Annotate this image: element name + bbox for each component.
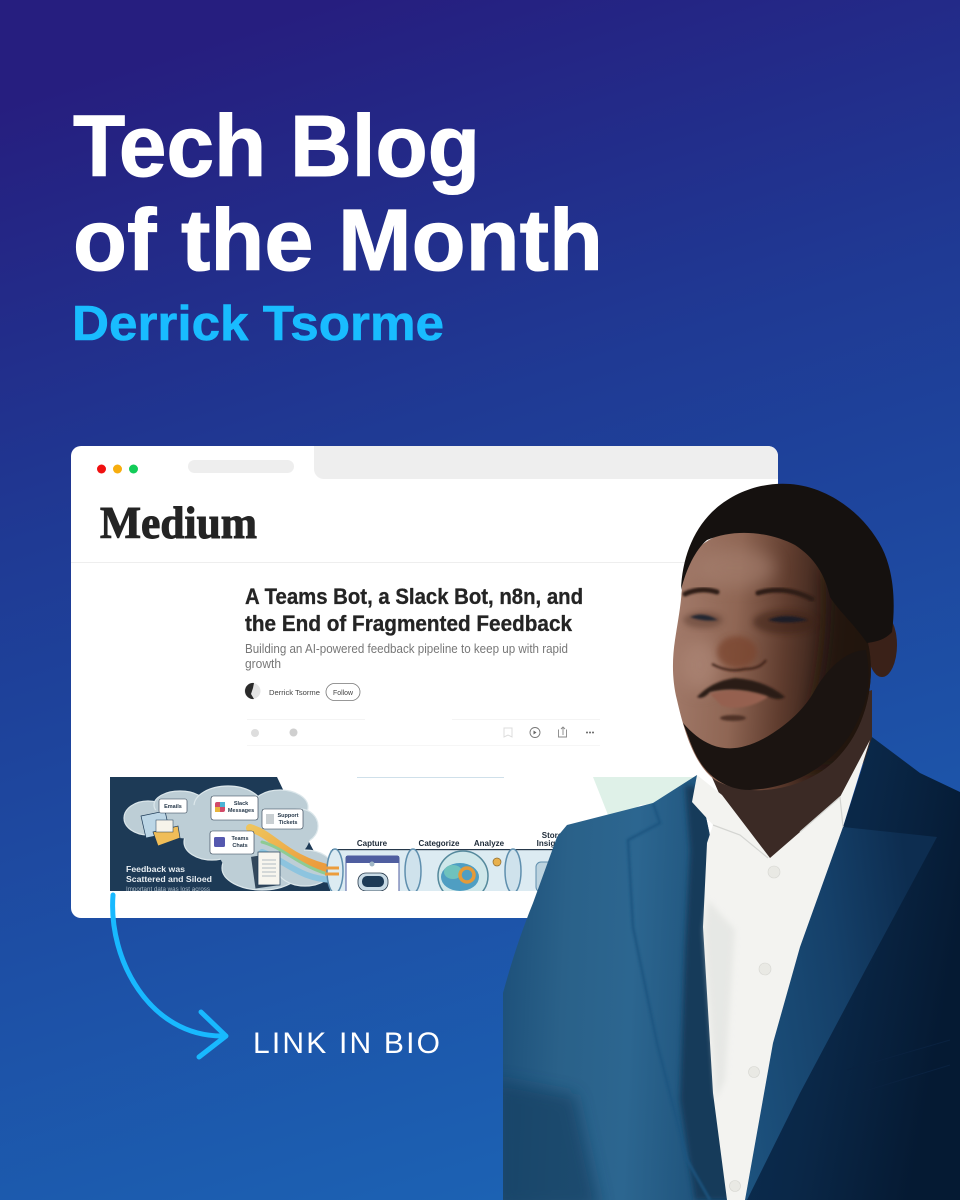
cover: pipeline labels: Analyze	[474, 839, 505, 848]
author name: Derrick Tsorme	[269, 688, 320, 697]
subtitle: author name: Derrick Tsorme	[72, 297, 444, 351]
jacket: left shadow by shirt	[680, 785, 735, 1200]
cover: speech bubbles: Messages	[228, 808, 254, 814]
moustache	[697, 678, 785, 699]
face	[673, 530, 871, 790]
cover: bot window	[346, 856, 399, 896]
shirt: body and collar	[692, 740, 870, 1200]
eyes	[690, 615, 808, 622]
cover: mint corner	[593, 777, 700, 814]
icon: share	[558, 727, 566, 737]
cover: pipeline	[325, 848, 553, 891]
chin soul patch	[720, 715, 746, 721]
cover: speech bubbles: Support	[277, 813, 299, 819]
cover: pipeline labels: Categorize	[419, 839, 460, 848]
face: right shadow	[808, 576, 871, 774]
article subtitle: growth	[245, 657, 281, 671]
cover: panel caption: Important data was lost across	[126, 886, 211, 893]
Medium logo: Medium	[100, 498, 257, 548]
neck	[700, 690, 872, 862]
cover: envelopes	[141, 811, 180, 846]
follow button: Follow	[333, 688, 354, 697]
arrow to link	[113, 895, 226, 1057]
beard	[683, 650, 869, 790]
shirt: fold shading	[704, 900, 735, 1100]
nose	[712, 636, 766, 670]
cover: panel caption: Feedback was	[126, 864, 185, 874]
shirt: collar edge	[713, 797, 843, 858]
cover: document stack	[251, 852, 280, 889]
cover: pipeline labels: Store	[542, 831, 563, 840]
browser tab bar	[314, 446, 778, 479]
article headline: the End of Fragmented Feedback	[245, 611, 573, 636]
title: Tech Blog	[73, 98, 480, 195]
portrait: man in suit	[495, 484, 960, 1200]
cover: pipeline labels: Capture	[357, 839, 388, 848]
cover: database	[536, 862, 548, 891]
title: of the Month	[73, 192, 603, 289]
title	[73, 98, 603, 289]
jacket: left lapel seam	[628, 803, 710, 1200]
cover: panel caption: Scattered and Siloed	[126, 874, 212, 884]
cover: speech bubbles: Chats	[232, 843, 248, 849]
cover: speech bubbles	[159, 796, 303, 854]
cover: speech bubbles: Slack	[234, 801, 249, 807]
face: eye shadows	[753, 610, 817, 634]
article subtitle	[245, 642, 568, 671]
cover: feedback cloud	[124, 786, 333, 890]
jacket	[495, 737, 960, 1200]
cover: speech bubbles: Tickets	[279, 820, 297, 826]
cover: data stream	[250, 828, 335, 880]
cover: pipeline labels	[357, 832, 560, 848]
article subtitle: Building an AI-powered feedback pipeline to keep up with rapid	[245, 642, 568, 656]
article headline: A Teams Bot, a Slack Bot, n8n, and	[245, 584, 583, 609]
shirt: buttons	[730, 866, 780, 1192]
shirt	[692, 740, 870, 1200]
follow button	[326, 684, 360, 700]
cover: faint top rule	[357, 777, 504, 778]
jacket: right lapel	[745, 827, 937, 1200]
article cover illustration	[110, 777, 700, 901]
author avatar	[244, 683, 260, 699]
jacket: sleeve shadow	[495, 1080, 600, 1200]
icon: clap	[251, 729, 259, 737]
cover: panel caption	[126, 866, 212, 891]
jacket: left side	[503, 775, 730, 1200]
cover: dark panel	[110, 777, 335, 891]
lips	[710, 691, 768, 708]
cover: pipeline labels: Insights	[537, 839, 568, 848]
panel: browser window	[71, 446, 778, 918]
jacket: breast pocket	[847, 1040, 950, 1095]
icon: play	[530, 728, 540, 738]
cover: speech bubbles: Emails	[164, 804, 182, 810]
ear	[867, 613, 897, 677]
jacket: right side	[745, 737, 960, 1200]
address pill	[188, 460, 294, 473]
face: forehead light	[707, 548, 778, 588]
icon: bookmark	[504, 728, 512, 737]
cover: brain gear	[437, 850, 502, 891]
eyebrows	[685, 590, 812, 599]
cover: speech bubbles: Teams	[231, 836, 249, 842]
article headline	[245, 584, 583, 636]
head	[673, 484, 897, 790]
link in bio label: LINK IN BIO	[253, 1027, 440, 1060]
window control dots	[97, 464, 138, 474]
hair	[681, 484, 894, 643]
face: left cheek light	[684, 642, 720, 688]
article action row	[247, 719, 600, 746]
icon: comment	[290, 728, 298, 736]
icon: more	[586, 732, 594, 734]
